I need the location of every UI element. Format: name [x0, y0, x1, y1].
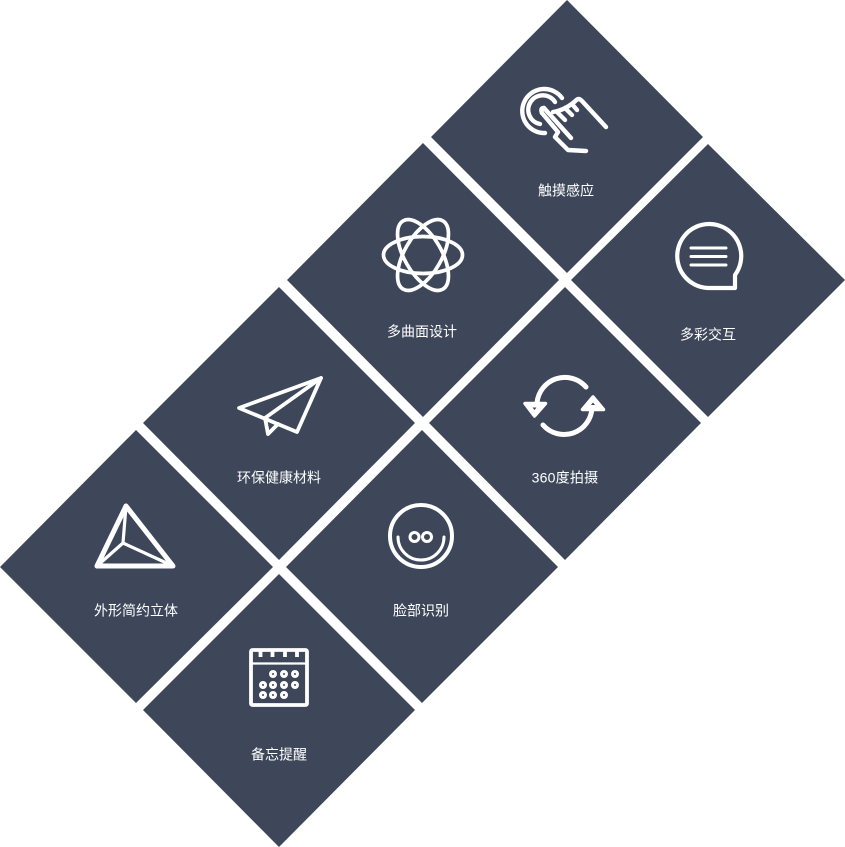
icon: speech bubble — [677, 224, 741, 288]
icon: calendar — [251, 650, 307, 705]
icon: paper plane — [239, 378, 321, 434]
panel: eco-friendly materials — [143, 287, 415, 560]
label: colorful interaction: 多彩交互 — [680, 326, 736, 342]
label: multi-curved design: 多曲面设计 — [387, 324, 457, 340]
panel: 360 degree capture — [429, 287, 701, 560]
label: memo reminder: 备忘提醒 — [251, 746, 307, 762]
panel: colorful interaction — [571, 144, 845, 417]
icon: touch hand — [522, 89, 606, 151]
icon: atom — [384, 212, 462, 298]
label: touch sensing: 触摸感应 — [538, 182, 594, 198]
panel: multi-curved design — [287, 143, 559, 417]
panel: face recognition — [286, 430, 558, 703]
label: 360 degree capture: 360度拍摄 — [532, 470, 598, 486]
label: simple shape: 外形简约立体 — [94, 602, 178, 618]
label: eco-friendly materials: 环保健康材料 — [237, 470, 321, 486]
panel: touch sensing — [431, 0, 703, 273]
icon: smiling face — [390, 505, 452, 567]
icon: tetrahedron — [97, 506, 173, 566]
panel: memo reminder — [143, 574, 415, 847]
icon: rotate arrows — [525, 377, 604, 435]
panel: simple shape — [0, 430, 273, 703]
label: face recognition: 脸部识别 — [393, 602, 449, 618]
